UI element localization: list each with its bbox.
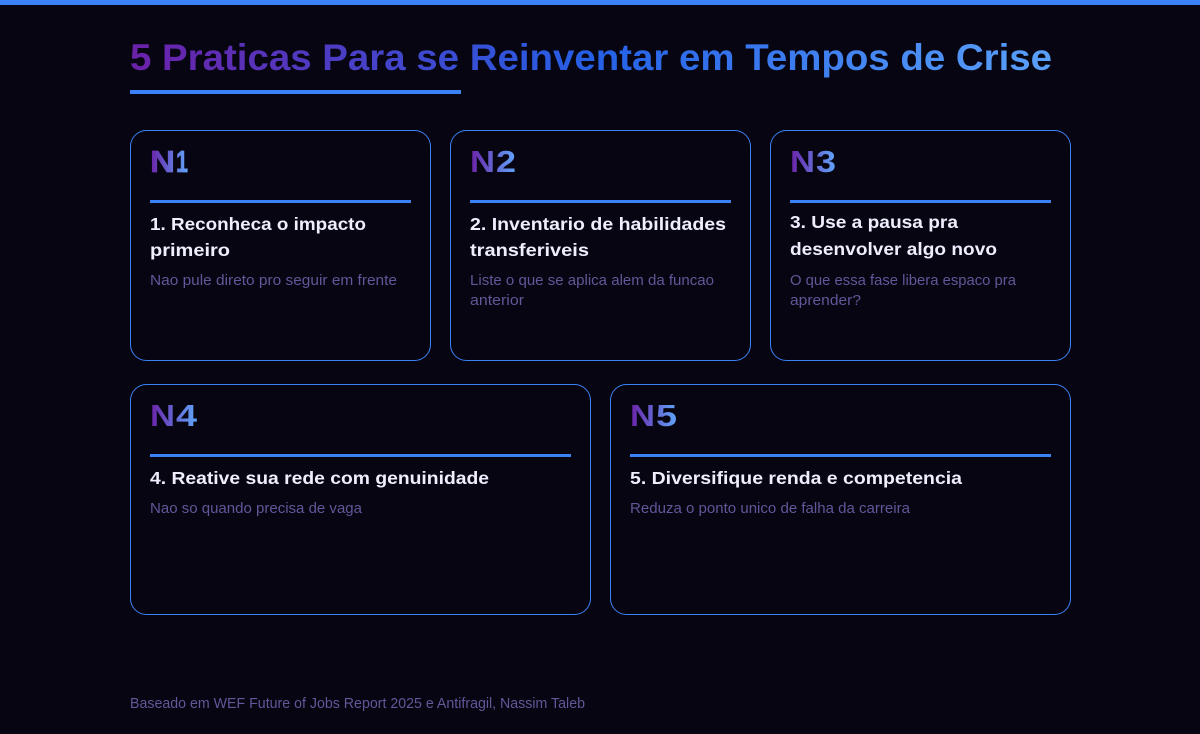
card 2 heading: 2. Inventario de habilidades	[470, 214, 726, 234]
card 3 description: O que essa fase libera espaco pra	[790, 272, 1017, 289]
card 5 heading: 5. Diversifique renda e competencia	[630, 468, 962, 488]
card 4 heading: 4. Reative sua rede com genuinidade	[150, 468, 489, 488]
title: 5 Praticas Para se Reinventar em Tempos de Crise	[130, 37, 1052, 78]
card 1 description: Nao pule direto pro seguir em frente	[150, 272, 397, 289]
card 1 heading: 1. Reconheca o impacto	[150, 214, 366, 234]
panel: card 5	[610, 384, 1070, 614]
card 1 number: 1	[176, 144, 188, 179]
card 1 heading: primeiro	[150, 240, 230, 260]
card 2 description: anterior	[470, 292, 524, 309]
card 5 number: N	[630, 398, 655, 433]
footer source note: Baseado em WEF Future of Jobs Report 2025 e Antifragil, Nassim Taleb	[130, 695, 585, 712]
card 4 number: 4	[176, 398, 198, 433]
card 4 description: Nao so quando precisa de vaga	[150, 500, 363, 517]
card 4 number: N	[150, 398, 175, 433]
card 3 number: 3	[816, 144, 836, 179]
card 5 description: Reduza o ponto unico de falha da carreira	[630, 500, 911, 517]
card 5 number: 5	[656, 398, 677, 433]
card 3 description: aprender?	[790, 292, 861, 309]
card 2 description: Liste o que se aplica alem da funcao	[470, 272, 714, 289]
panel: card 3	[770, 130, 1070, 360]
card 3 number: N	[790, 144, 815, 179]
panel: card 2	[450, 130, 750, 360]
card 2 number: N	[470, 144, 495, 179]
card 1 number: N	[150, 144, 175, 179]
card 3 heading: 3. Use a pausa pra	[790, 212, 958, 232]
card 2 number: 2	[496, 144, 516, 179]
card 3 heading: desenvolver algo novo	[790, 239, 997, 259]
card 2 heading: transferiveis	[470, 240, 589, 260]
top accent bar	[0, 0, 1200, 5]
title underline	[130, 90, 461, 94]
panel: card 4	[130, 384, 590, 614]
panel: card 1	[130, 130, 430, 360]
